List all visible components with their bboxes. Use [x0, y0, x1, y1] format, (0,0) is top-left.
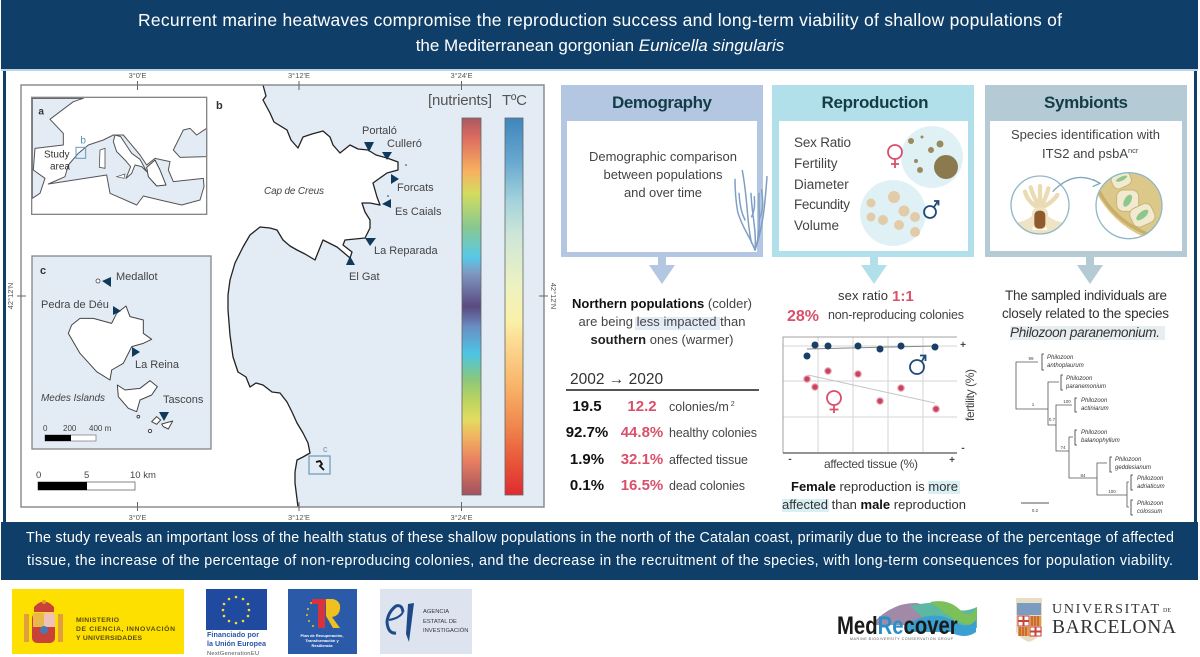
text: northern vs southern populations	[572, 296, 752, 347]
text: sex ratio: 1:1	[892, 288, 914, 305]
panel: Reproduction	[772, 85, 974, 284]
panel: Demography	[561, 85, 767, 284]
axis labels: affected tissue (%)	[824, 457, 918, 471]
logo: Universitat de Barcelona: BARCELONA	[1052, 617, 1176, 638]
chart: phylogenetic tree: 0.2	[1032, 508, 1039, 513]
legend: temperature colour bar	[502, 92, 527, 495]
inset a: Mediterranean: b	[80, 135, 86, 146]
chart: phylogenetic tree	[1016, 354, 1165, 515]
list: measured traits: Sex Ratio	[794, 135, 851, 150]
locator box c	[309, 444, 330, 474]
title banner: the Mediterranean gorgonian Eunicella singularis	[416, 36, 785, 55]
text: symbiont conclusion: Philozoon paranemonium.	[1010, 325, 1160, 340]
text: sex ratio: non-reproducing colonies	[828, 308, 964, 322]
panel: study area map	[6, 71, 558, 522]
axis ticks and coordinate labels: 42°12'N	[549, 283, 558, 309]
axis labels: +	[949, 455, 955, 466]
logo: Plan de Recuperacion: Resiliencia	[312, 643, 333, 648]
heading: Demography: Demography	[612, 93, 713, 112]
logo: NextGenerationEU	[206, 589, 267, 657]
logo: Universitat de Barcelona	[1016, 598, 1176, 642]
list: measured traits: Diameter	[794, 177, 849, 192]
conclusion banner: tissue, the increase of the percentage of non-reproducing colonies, and the decrease in the recruitment of the species, with long-term consequences for population viability.	[27, 553, 1173, 569]
arrow	[649, 257, 675, 284]
text: symbiont conclusion: closely related to the species	[1002, 306, 1169, 321]
panel: study area map: Forcats	[397, 182, 434, 194]
map: land and coastline	[21, 85, 398, 507]
inset c: Medes Islands: 0	[43, 424, 48, 433]
panel: study area map: La Reparada	[374, 245, 438, 257]
chart: phylogenetic tree: 100	[1063, 399, 1071, 404]
sampling sites	[346, 142, 407, 265]
text: demographic comparison: and over time	[624, 185, 702, 200]
chart: phylogenetic tree: 1	[1032, 402, 1035, 407]
arrow	[1077, 257, 1103, 284]
table: 2002 to 2020 comparison: 92.7%	[566, 424, 608, 441]
panel: study area map: Portaló	[362, 125, 397, 137]
list: measured traits: Fertility	[794, 156, 838, 171]
male data points	[804, 342, 938, 360]
inset c: Medes Islands: Pedra de Déu	[41, 299, 109, 311]
logo: Universitat de Barcelona: UNIVERSITAT	[1052, 602, 1159, 617]
table: 2002 to 2020 comparison: 0.1%	[570, 477, 604, 494]
table: 2002 to 2020 comparison: colonies/m	[669, 400, 729, 414]
panel: study area map: El Gat	[349, 271, 380, 283]
logo: Ministerio de Ciencia: DE CIENCIA, INNOVACIÓN	[76, 624, 175, 633]
heading: Reproduction: Reproduction	[822, 93, 928, 112]
table: 2002 to 2020 comparison: 2002 → 2020	[570, 371, 663, 388]
label: b: b	[216, 100, 223, 112]
text: sex ratio: 28%	[787, 308, 819, 325]
table: 2002 to 2020 comparison: healthy colonies	[669, 426, 757, 440]
frame: page edge bars	[3, 68, 1197, 524]
title banner	[1, 0, 1198, 71]
scale bar: 5	[84, 470, 89, 481]
table: 2002 to 2020 comparison: 19.5	[572, 398, 602, 415]
list: measured traits: Volume	[794, 218, 839, 233]
heading: Symbionts: Symbionts	[1044, 93, 1128, 112]
axis labels: -	[788, 454, 792, 465]
illustration: male spermatic cysts	[860, 180, 938, 246]
logo: Ministerio de Ciencia: MINISTERIO	[76, 617, 119, 624]
table: 2002 to 2020 comparison: 1.9%	[570, 451, 604, 468]
text: species identification: ITS2 and psbA	[1042, 146, 1128, 161]
table: 2002 to 2020 comparison: 16.5%	[621, 477, 663, 494]
logo: Agencia Estatal de Investigacion: AGENCIA	[423, 609, 449, 615]
icon: female symbol	[827, 391, 841, 413]
inset a: Mediterranean: a	[38, 107, 44, 118]
list: measured traits: Fecundity	[794, 197, 850, 212]
inset c: Medes Islands	[32, 256, 211, 449]
arrow	[861, 257, 887, 284]
panel: study area map: Culleró	[387, 138, 422, 150]
label: Cap de Creus: Cap de Creus	[264, 186, 324, 197]
text: female reproduction conclusion: Female reproduction is more	[791, 479, 958, 494]
text: symbiont conclusion: The sampled individuals are	[1005, 288, 1167, 303]
text: demographic comparison: between populations	[604, 167, 723, 182]
inset a: Mediterranean: Study	[44, 149, 70, 160]
chart: phylogenetic tree: anthoplaurum	[1047, 363, 1084, 369]
logo: Universitat de Barcelona: DE	[1163, 608, 1171, 614]
inset a: Mediterranean	[32, 97, 207, 214]
logo: NextGenerationEU: Financiado por	[207, 630, 259, 639]
conclusion banner: The study reveals an important loss of the health status of these shallow populations in the north of the Catalan coast, primarily due to the increase of the percentage of affected	[26, 530, 1174, 546]
chart: phylogenetic tree: adriaticum	[1137, 484, 1165, 490]
chart: phylogenetic tree: Philozoon	[1047, 355, 1074, 361]
text: species identification: Species identification with	[1011, 127, 1160, 142]
logo: Agencia Estatal de Investigacion: INVESTIGACIÓN	[423, 627, 468, 634]
table: 2002 to 2020 comparison: 12.2	[627, 398, 657, 415]
table: 2002 to 2020 comparison: 2	[731, 401, 735, 408]
scale bar: 0	[36, 470, 41, 481]
conclusion banner	[1, 522, 1198, 580]
inset c: Medes Islands: 200	[63, 424, 77, 433]
table: 2002 to 2020 comparison: affected tissue	[669, 453, 748, 467]
axis ticks and coordinate labels: 3°12'E	[288, 513, 310, 522]
coastline stroke	[228, 85, 398, 507]
text: northern vs southern populations: are being less impacted than	[578, 314, 746, 329]
chart: phylogenetic tree: Philozoon	[1066, 376, 1093, 382]
chart: phylogenetic tree: colossum	[1137, 509, 1162, 515]
table: 2002 to 2020 comparison: 32.1%	[621, 451, 663, 468]
chart: phylogenetic tree: 100	[1108, 489, 1116, 494]
logo: Plan de Recuperacion: Plan de Recuperación,	[301, 633, 343, 638]
chart: phylogenetic tree: Philozoon	[1115, 457, 1142, 463]
icon: male symbol	[910, 356, 926, 374]
text: symbiont conclusion	[1002, 288, 1169, 340]
icon: gorgonian	[735, 171, 767, 250]
chart: phylogenetic tree: Philozoon	[1081, 430, 1108, 436]
logo: NextGenerationEU: la Unión Europea	[207, 639, 267, 648]
axis labels: +	[960, 340, 966, 351]
table: 2002 to 2020 comparison: 44.8%	[621, 424, 663, 441]
text: sex ratio	[787, 288, 964, 325]
axis ticks and coordinate labels: 3°24'E	[451, 71, 472, 80]
legend: temperature colour bar: TºC	[502, 92, 527, 109]
chart: phylogenetic tree: 0.7	[1049, 417, 1056, 422]
text: northern vs southern populations: Northern populations (colder)	[572, 296, 752, 311]
chart: fertility vs affected tissue	[783, 337, 977, 471]
text: species identification	[1011, 127, 1160, 161]
chart: phylogenetic tree: paranemonium	[1065, 384, 1106, 390]
chart: phylogenetic tree: Philozoon	[1137, 501, 1164, 507]
chart: phylogenetic tree: actiniarum	[1081, 406, 1109, 412]
text: sex ratio: sex ratio	[838, 288, 888, 303]
chart: phylogenetic tree: Philozoon	[1137, 476, 1164, 482]
panel: study area map: Es Caials	[395, 206, 442, 218]
axis ticks and coordinate labels: 3°0'E	[129, 513, 146, 522]
inset c: Medes Islands: Tascons	[163, 394, 204, 406]
text: northern vs southern populations: southern ones (warmer)	[590, 332, 734, 347]
illustration: female oocytes	[888, 126, 963, 188]
table: 2002 to 2020 comparison	[566, 371, 759, 494]
axis ticks and coordinate labels	[6, 71, 558, 522]
text: demographic comparison	[589, 149, 737, 200]
axis labels: fertility (%)	[963, 369, 977, 421]
scale bar: 10 km	[130, 470, 156, 481]
chart: phylogenetic tree: balanophyllum	[1081, 438, 1120, 444]
panel: Symbionts	[985, 85, 1187, 284]
axis ticks and coordinate labels: 3°24'E	[451, 513, 472, 522]
chart: phylogenetic tree: geddesianum	[1115, 465, 1151, 471]
title banner: Recurrent marine heatwaves compromise the reproduction success and long-term viability of shallow populations of	[138, 10, 1062, 30]
chart: phylogenetic tree: 74	[1060, 445, 1066, 450]
axis ticks and coordinate labels: 3°0'E	[129, 71, 146, 80]
inset c: Medes Islands: Medallot	[116, 271, 158, 283]
illustration: polyp and symbiont cells	[1010, 169, 1162, 243]
logo: Ministerio de Ciencia: Y UNIVERSIDADES	[76, 635, 142, 642]
scale bar	[36, 470, 156, 490]
axis labels: -	[961, 443, 965, 454]
logo: Agencia Estatal de Investigacion	[380, 589, 472, 654]
list: measured traits	[794, 135, 851, 233]
chart: phylogenetic tree: 84	[1080, 473, 1086, 478]
inset c: Medes Islands: Medes Islands	[41, 393, 105, 404]
inset c: Medes Islands: 400 m	[89, 424, 112, 433]
legend: nutrients colour bar: [nutrients]	[428, 92, 492, 109]
female data points	[804, 368, 939, 412]
logo: Plan de Recuperacion: Transformación y	[305, 638, 339, 643]
chart: phylogenetic tree: 99	[1028, 356, 1034, 361]
text: species identification: ncr	[1128, 146, 1139, 155]
inset a: Mediterranean: area	[50, 161, 70, 172]
table: 2002 to 2020 comparison: dead colonies	[669, 479, 745, 493]
text: female reproduction conclusion	[782, 479, 966, 512]
logo: Agencia Estatal de Investigacion: ESTATAL DE	[423, 619, 457, 625]
axis ticks and coordinate labels: 3°12'E	[288, 71, 310, 80]
logo: Plan de Recuperacion	[288, 589, 357, 654]
locator box c: c	[323, 444, 328, 454]
logo: NextGenerationEU: NextGenerationEU	[207, 651, 259, 657]
logo: MedRecover: MARINE BIODIVERSITY CONSERVATION GROUP	[850, 637, 954, 641]
chart: phylogenetic tree: Philozoon	[1081, 398, 1108, 404]
text: demographic comparison: Demographic comparison	[589, 149, 737, 164]
inset c: Medes Islands: La Reina	[135, 359, 180, 371]
logo: Ministerio de Ciencia	[12, 589, 184, 654]
logo: MedRecover	[837, 601, 977, 641]
text: female reproduction conclusion: affected than male reproduction	[782, 497, 966, 512]
logo: MedRecover: MedRecover	[837, 611, 958, 640]
legend: nutrients colour bar	[428, 92, 492, 495]
axis labels	[788, 340, 977, 471]
inset c: Medes Islands: c	[40, 265, 46, 277]
axis ticks and coordinate labels: 42°12'N	[6, 283, 15, 309]
